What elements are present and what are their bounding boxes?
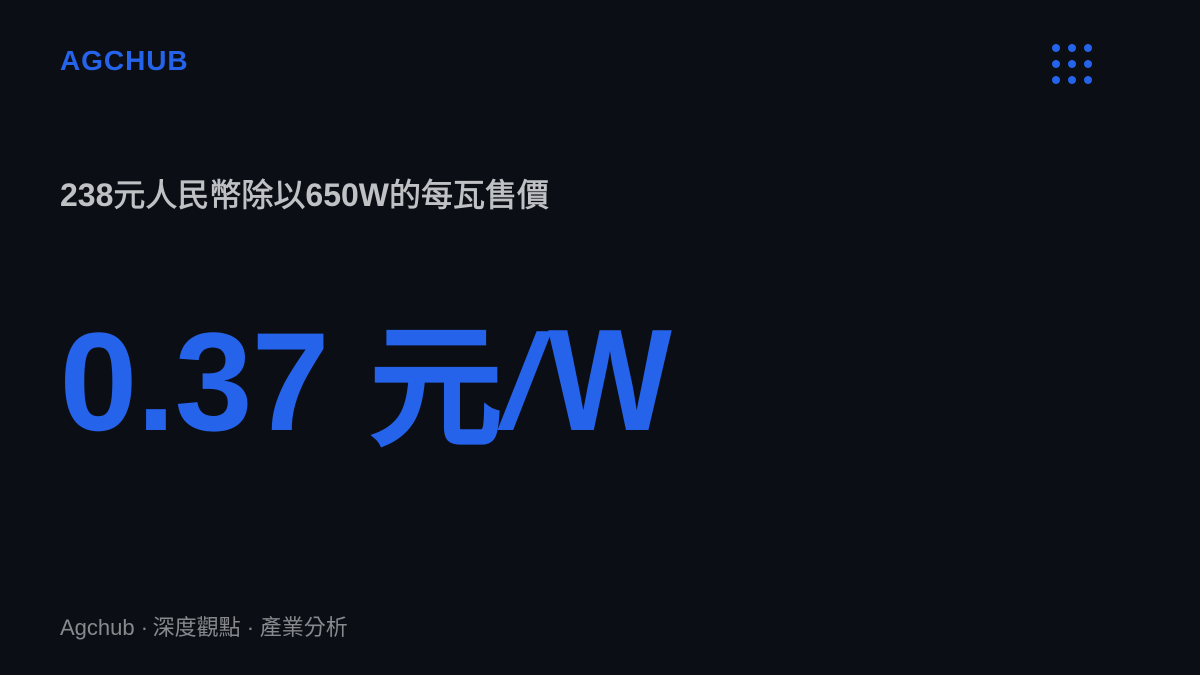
main figure: price per watt: W — [548, 300, 672, 461]
logo: AGCHUB: AGCHUB — [60, 45, 189, 76]
heading: calculation description: 238元人民幣除以650W的每瓦售價 — [60, 177, 549, 213]
icon: dot grid — [1052, 44, 1092, 84]
main figure: price per watt: 元 — [370, 314, 502, 462]
footer: tagline: Agchub · 深度觀點 · 產業分析 — [60, 615, 348, 640]
main figure: price per watt — [60, 300, 672, 462]
main figure: price per watt: 0.37 — [60, 303, 329, 460]
main figure: price per watt: / — [497, 306, 553, 459]
